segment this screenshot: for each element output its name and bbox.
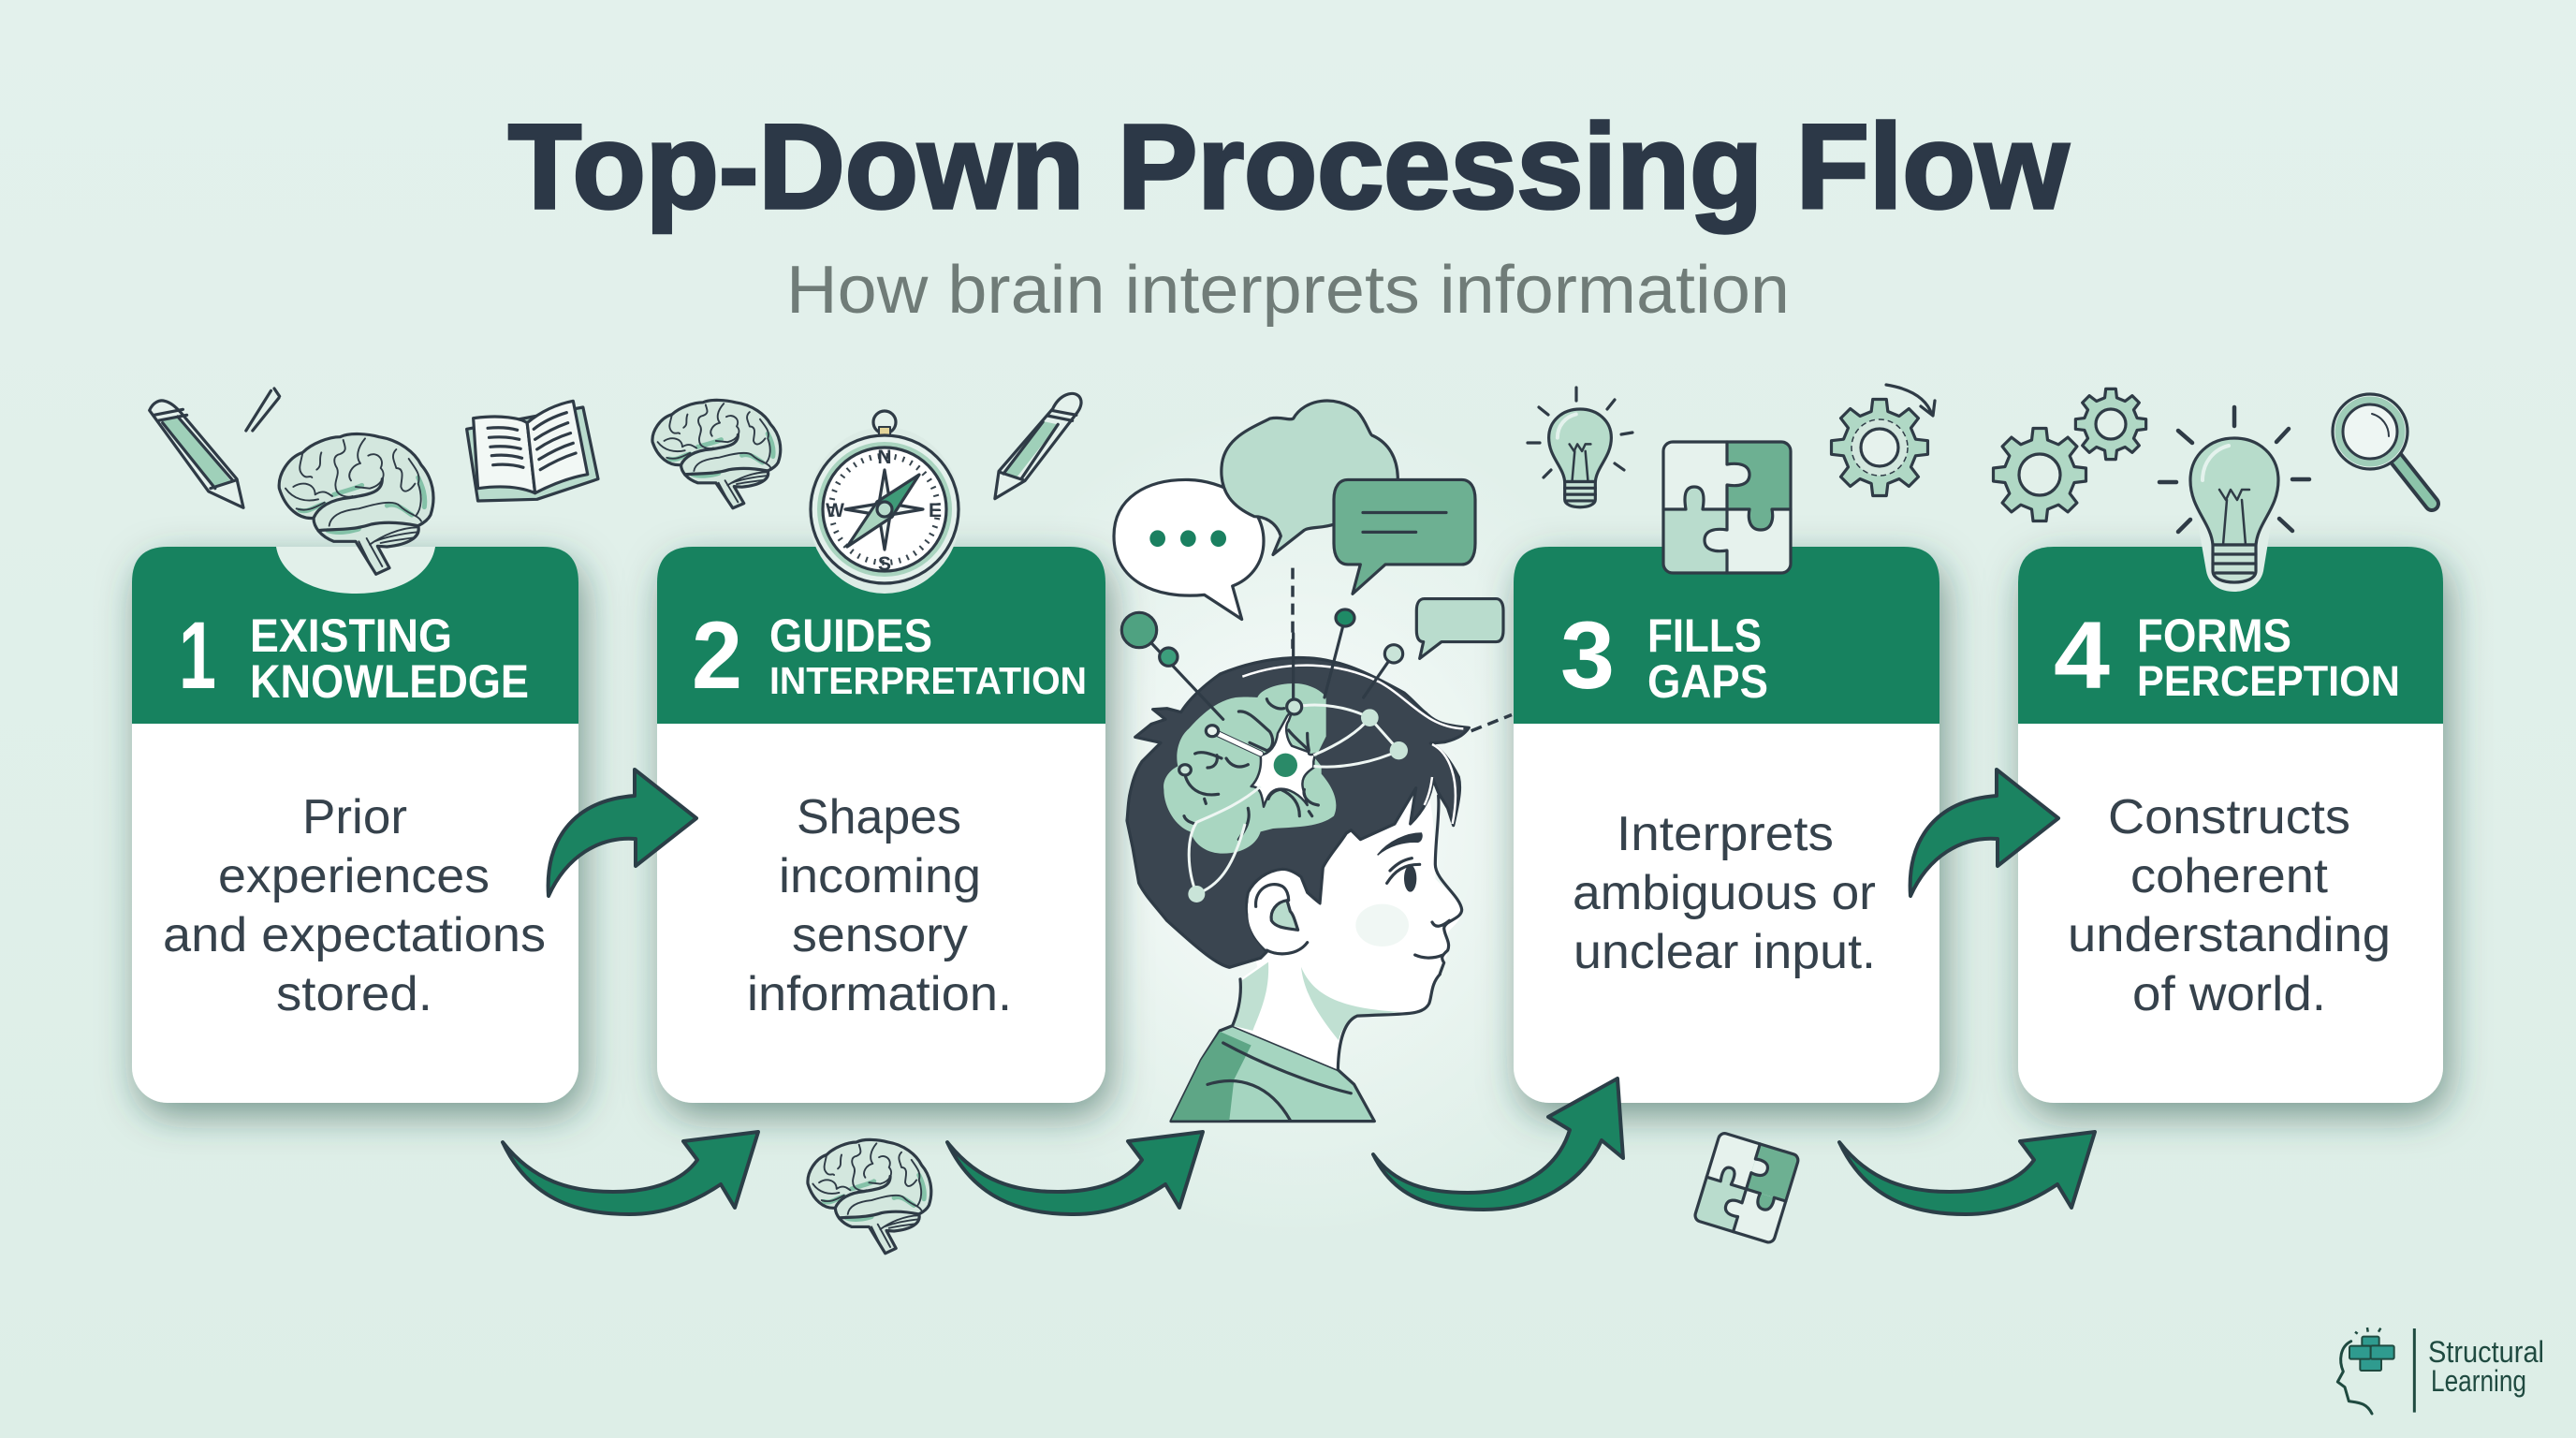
panel 4 heading [2137, 609, 2400, 705]
icon: large light bulb on step 4 [2159, 407, 2309, 592]
illustration: child head with speech bubbles and brain network [1114, 401, 1512, 1122]
shirt [1171, 1026, 1374, 1122]
subtitle: How brain interprets information [786, 253, 1790, 328]
head detail [1121, 609, 1469, 974]
icon: large gear [1994, 429, 2086, 521]
icon: small pencil stroke [246, 389, 280, 431]
panel 1 heading: KNOWLEDGE [250, 655, 529, 708]
icon: pencil left [150, 389, 280, 507]
notch in header [276, 547, 435, 594]
panel 4 body text: understanding [2068, 908, 2391, 962]
hair highlights [1242, 666, 1463, 824]
network lines [1139, 618, 1398, 894]
panel 3 heading: GAPS [1647, 655, 1768, 708]
panel: step 2 guides interpretation [657, 547, 1105, 1103]
cheek [1355, 904, 1409, 946]
panel 2 body text: information. [747, 967, 1012, 1021]
eye and brow [1378, 833, 1422, 892]
nose and mouth [1415, 920, 1449, 958]
face profile [1435, 796, 1462, 974]
icon: compass: W [826, 500, 844, 521]
panel 4 heading: PERCEPTION [2137, 657, 2400, 705]
panel 4 body text: of world. [2132, 967, 2326, 1021]
icon: tilted puzzle [1693, 1132, 1800, 1244]
title: Top-Down Processing Flow [508, 100, 2069, 234]
logo wordmark: Structural [2428, 1335, 2544, 1369]
panel 2 body text: Shapes [797, 790, 961, 844]
icon: compass [808, 411, 961, 594]
panel 4 number: 4 [2054, 602, 2110, 709]
panel 1 body text: and expectations [163, 908, 546, 962]
logo: Structural Learning [2337, 1328, 2544, 1414]
panel 4 body text [2068, 790, 2391, 1021]
panel 1 number: 1 [179, 602, 216, 709]
panel: step 1 existing knowledge [132, 547, 578, 1103]
logo icon [2337, 1328, 2414, 1414]
icon: brain between lower arrows [808, 1139, 931, 1254]
panel 4 heading: FORMS [2137, 609, 2291, 662]
icon: gear with arrow [1832, 385, 1935, 495]
icon: small gear [2075, 389, 2146, 460]
panel 2 body text: sensory [792, 908, 968, 962]
network nodes [1121, 609, 1408, 902]
icon: compass: N [877, 447, 892, 468]
icon: compass: S [878, 553, 891, 575]
green speech bubble [1334, 479, 1475, 594]
white speech bubble [1114, 479, 1264, 620]
panel 2 header band [657, 547, 1105, 724]
arrow: step 1 to step 2 [549, 770, 696, 896]
panel 1 heading [250, 609, 529, 708]
panel 3 number: 3 [1560, 602, 1615, 709]
panel 3 body text: unclear input. [1573, 925, 1876, 979]
panel 3 header band [1514, 547, 1939, 724]
icon: magnifying glass [2333, 394, 2432, 504]
panel 2 heading: GUIDES [769, 609, 932, 662]
panel 1 body text: stored. [276, 967, 432, 1021]
logo wordmark: Learning [2431, 1364, 2526, 1398]
panel 3 heading: FILLS [1647, 609, 1762, 662]
icon: pencil right [995, 393, 1081, 499]
speech bubbles [1114, 401, 1512, 1122]
panel 1 header band [132, 547, 578, 724]
panel 4 header band [2018, 547, 2443, 724]
arrow: lower flow three [1373, 1078, 1623, 1210]
panel 3 body text: Interprets [1617, 807, 1834, 861]
panel 1 body text [163, 790, 546, 1021]
panel 1 body text: Prior [302, 790, 407, 844]
panel 3 body text [1573, 807, 1876, 979]
icon: brain above step 2 [652, 400, 781, 508]
arrow: lower flow one [503, 1132, 758, 1214]
dashed connectors [1293, 568, 1512, 731]
panel: step 4 forms perception [2018, 547, 2443, 1103]
panel 4 body text: coherent [2130, 849, 2329, 903]
hair [1127, 657, 1469, 967]
cloud speech bubble [1222, 401, 1398, 554]
logo wordmark [2428, 1335, 2544, 1398]
panel 1 body text: experiences [218, 849, 490, 903]
panel 2 body text: incoming [779, 849, 981, 903]
small speech bubble [1416, 599, 1503, 658]
panel 3 heading [1647, 609, 1768, 708]
icon: brain above step 1 [276, 434, 435, 594]
icon: small light bulb [1528, 388, 1632, 507]
panel: step 3 fills gaps [1514, 547, 1939, 1103]
panel 2 number: 2 [692, 602, 742, 709]
icon: open book [467, 401, 598, 501]
panel 2 body text [747, 790, 1012, 1021]
icon: compass: E [929, 500, 942, 521]
icon: puzzle on step 3 [1663, 442, 1791, 573]
face and neck [1233, 796, 1462, 1070]
panel 1 heading: EXISTING [250, 609, 452, 662]
arrow: lower flow two [947, 1132, 1203, 1214]
panel 3 body text: ambiguous or [1573, 866, 1876, 920]
panel 2 heading: INTERPRETATION [769, 659, 1087, 702]
panel 4 body text: Constructs [2108, 790, 2350, 844]
ear [1248, 873, 1320, 954]
panel 2 heading [769, 609, 1087, 702]
arrow: lower flow four [1839, 1132, 2095, 1214]
brain inside head [1164, 683, 1336, 854]
arrow: step 3 to step 4 [1910, 770, 2058, 896]
